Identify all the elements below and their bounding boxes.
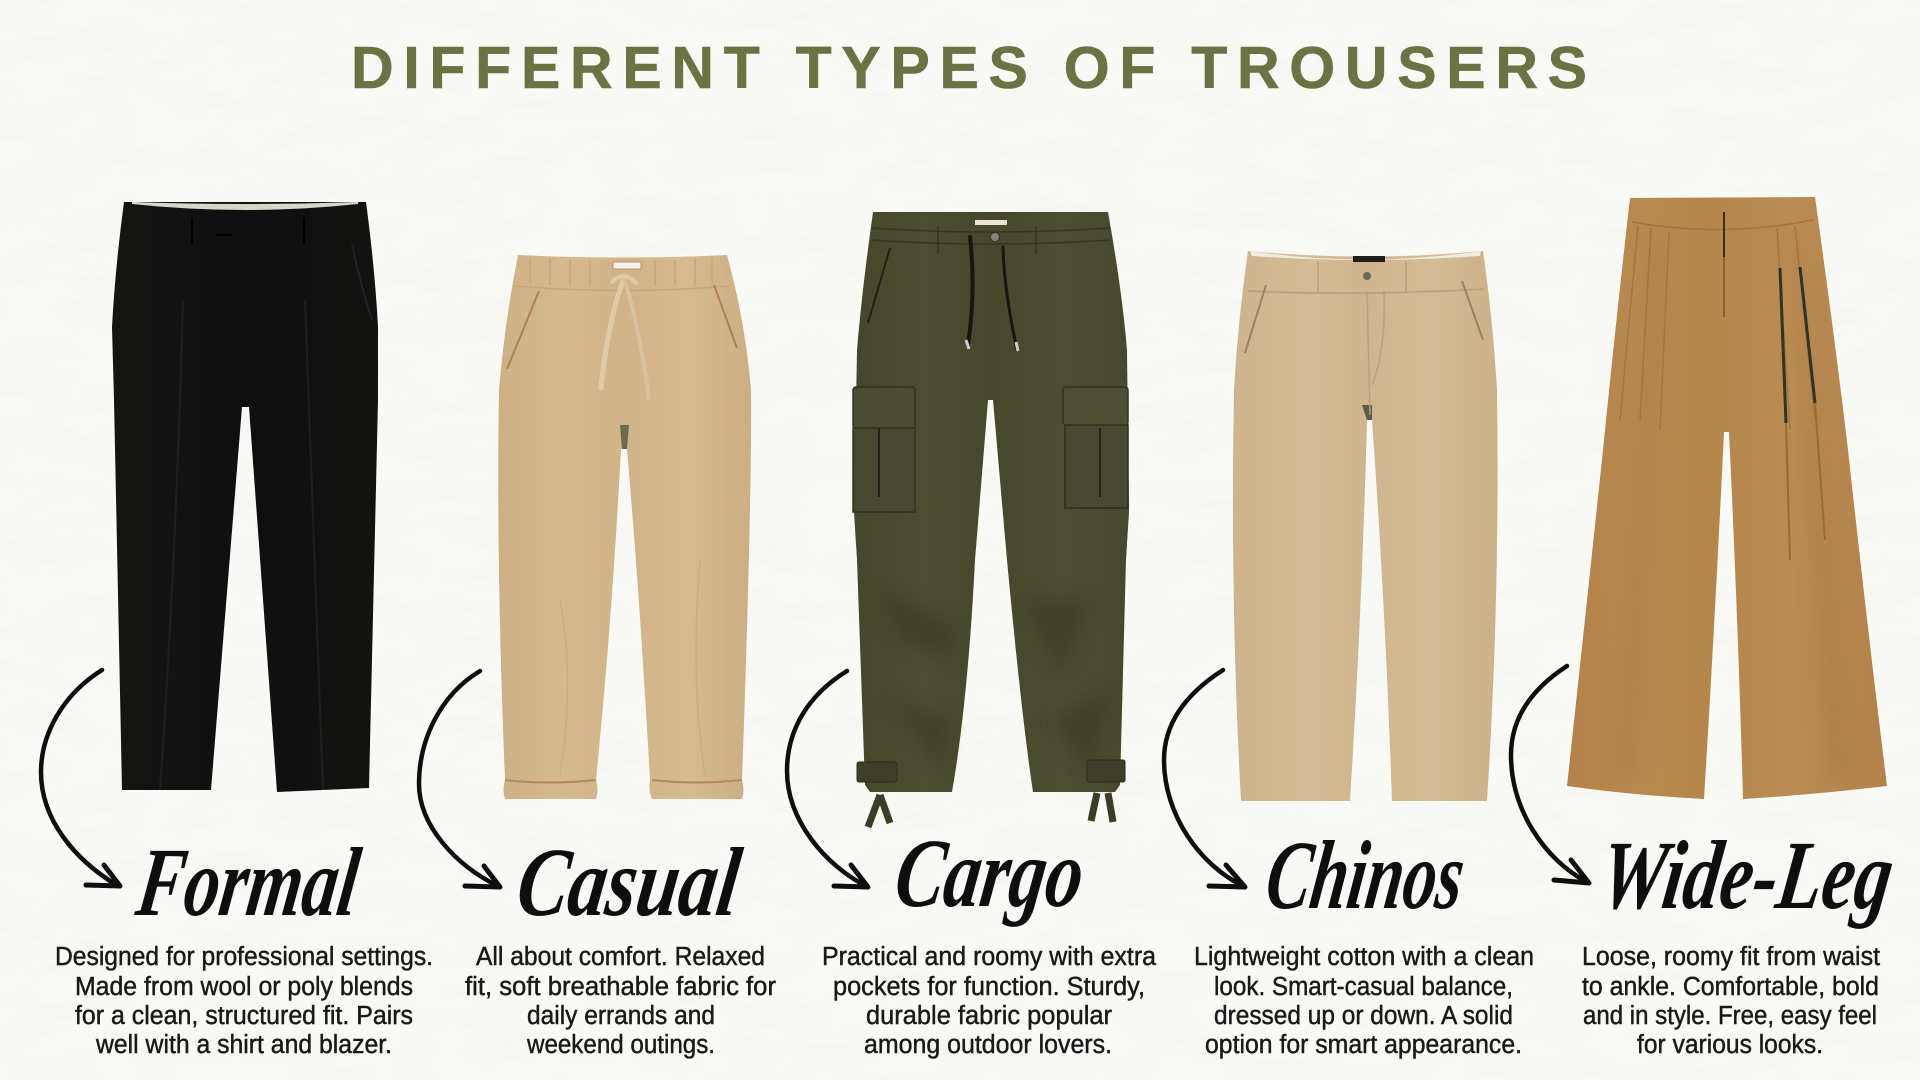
description: Casual: fit, soft breathable fabric for bbox=[465, 973, 776, 1001]
description: Wide-Leg: to ankle. Comfortable, bold bbox=[1582, 973, 1879, 1001]
description: Cargo: pockets for function. Sturdy, bbox=[833, 973, 1145, 1001]
heading: Chinos: Chinos bbox=[1260, 821, 1471, 930]
description: Casual: daily errands and bbox=[527, 1002, 715, 1030]
arrow: to Casual bbox=[419, 671, 500, 887]
arrow: to Cargo bbox=[787, 671, 868, 887]
description: Cargo: among outdoor lovers. bbox=[864, 1031, 1112, 1059]
icon: right cargo pocket bbox=[1063, 387, 1128, 508]
trousers: camel wide-leg bbox=[1567, 197, 1887, 799]
description: Chinos bbox=[1194, 943, 1534, 1059]
panel: casual trousers bbox=[419, 255, 776, 1059]
description: Wide-Leg bbox=[1582, 943, 1880, 1059]
description: Formal: for a clean, structured fit. Pairs bbox=[75, 1002, 413, 1030]
panel: formal trousers bbox=[41, 202, 433, 1059]
icon: left cargo pocket bbox=[853, 387, 915, 512]
heading: Casual: Casual bbox=[511, 828, 748, 937]
description: Casual: weekend outings. bbox=[526, 1031, 715, 1059]
trousers: beige casual with drawstring bbox=[498, 255, 751, 799]
description: Chinos: Lightweight cotton with a clean bbox=[1194, 943, 1534, 971]
description: Wide-Leg: Loose, roomy fit from waist bbox=[1582, 943, 1880, 971]
arrow: to Wide-Leg bbox=[1511, 666, 1589, 883]
description: Wide-Leg: and in style. Free, easy feel bbox=[1583, 1002, 1877, 1030]
title: DIFFERENT TYPES OF TROUSERS bbox=[351, 35, 1587, 101]
heading: Formal: Formal bbox=[130, 828, 367, 937]
heading: Cargo: Cargo bbox=[889, 819, 1091, 928]
description: Cargo: durable fabric popular bbox=[866, 1002, 1112, 1030]
arrow: to Chinos bbox=[1164, 670, 1245, 887]
description: Chinos: look. Smart-casual balance, bbox=[1214, 973, 1513, 1001]
panel: wide-leg trousers bbox=[1511, 197, 1900, 1059]
description: Cargo: Practical and roomy with extra bbox=[822, 943, 1157, 971]
description: Casual: All about comfort. Relaxed bbox=[476, 943, 765, 971]
trousers: olive cargo bbox=[853, 212, 1129, 827]
description: Formal bbox=[55, 943, 433, 1059]
description: Chinos: dressed up or down. A solid bbox=[1214, 1002, 1513, 1030]
description: Formal: Designed for professional settings. bbox=[55, 943, 433, 971]
icon: left ankle strap and ties bbox=[857, 762, 897, 827]
trousers: khaki chinos bbox=[1233, 251, 1498, 801]
trousers: black formal bbox=[112, 202, 378, 792]
description: Formal: well with a shirt and blazer. bbox=[95, 1031, 392, 1059]
description: Chinos: option for smart appearance. bbox=[1205, 1031, 1522, 1059]
description: Casual bbox=[465, 943, 776, 1059]
description: Cargo bbox=[822, 943, 1157, 1059]
arrow: to Formal bbox=[41, 670, 120, 886]
panel: chinos bbox=[1164, 251, 1534, 1059]
description: Formal: Made from wool or poly blends bbox=[75, 973, 413, 1001]
description: Wide-Leg: for various looks. bbox=[1637, 1031, 1823, 1059]
panel: cargo trousers bbox=[787, 212, 1157, 1059]
icon: right ankle strap and ties bbox=[1087, 760, 1125, 822]
